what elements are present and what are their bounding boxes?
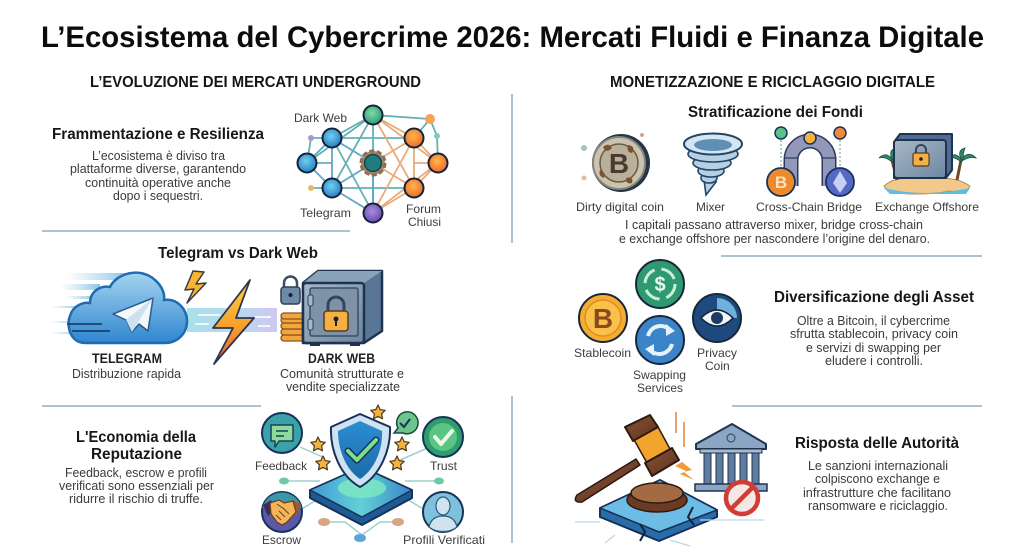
panel: telegram vs dark web <box>50 245 404 394</box>
icon: safe <box>303 271 382 346</box>
section heading: monetizzazione: MONETIZZAZIONE E RICICLAGGIO DIGITALE <box>610 74 935 91</box>
text block: risposta: ransomware e riciclaggio. <box>808 499 948 513</box>
text block: reputazione: verificati sono essenziali per <box>59 479 214 493</box>
label: forum chiusi: Chiusi <box>408 215 441 229</box>
icon: cracked block <box>575 480 764 546</box>
text block: risposta <box>803 459 951 513</box>
label: forum chiusi <box>406 202 441 229</box>
label: escrow: Escrow <box>262 533 301 547</box>
labels: assets: Privacy <box>697 346 737 360</box>
text block: reputazione <box>59 466 214 506</box>
icon: speed lines <box>50 273 126 334</box>
icon: dirty coin: B <box>609 148 629 179</box>
icon: coin stack <box>281 313 305 341</box>
labels: assets: Swapping <box>633 368 686 382</box>
icon: cross-chain bridge <box>767 127 854 196</box>
icon: chat check bubble <box>394 412 418 434</box>
icon: privacy eye <box>693 294 741 342</box>
text block: diversificazione: e servizi di swapping per <box>806 341 941 355</box>
labels: laundering steps: Dirty digital coin <box>576 200 664 214</box>
text block: frammentazione: L’ecosistema è diviso tra <box>92 149 225 163</box>
label: trust: Trust <box>430 459 458 473</box>
text block: reputazione: Feedback, escrow e profili <box>65 466 207 480</box>
panel: frammentazione e resilienza <box>52 106 448 229</box>
text block: frammentazione <box>70 149 246 203</box>
labels: laundering steps <box>576 200 979 214</box>
text block: frammentazione: continuità operative anche <box>85 176 231 190</box>
text block: diversificazione <box>790 314 958 368</box>
section heading: mercati underground: L’EVOLUZIONE DEI MERCATI UNDERGROUND <box>90 74 421 91</box>
text block: risposta: Le sanzioni internazionali <box>808 459 948 473</box>
icon: gavel <box>575 415 687 512</box>
icon: trust <box>423 417 463 473</box>
panel: economia della reputazione <box>59 405 485 547</box>
heading: economia della reputazione: Reputazione <box>91 446 182 463</box>
icon: cross-chain bridge: B <box>775 173 787 192</box>
label: dark web: Comunità strutturate e <box>280 367 404 381</box>
icon: mixer tornado <box>684 134 742 195</box>
text block: stratificazione: I capitali passano attraverso mixer, bridge cross-chain <box>625 218 923 232</box>
heading: risposta: Risposta delle Autorità <box>795 435 959 452</box>
text block: frammentazione: plattaforme diverse, garantendo <box>70 162 246 176</box>
icon: small lightning <box>185 271 206 303</box>
labels: assets: Coin <box>705 359 730 373</box>
icon: prohibition sign <box>726 482 758 514</box>
icon: profili verificati <box>403 492 485 547</box>
panel: diversificazione degli asset <box>574 260 975 395</box>
panel: risposta delle autorità <box>575 412 959 546</box>
label: forum chiusi: Forum <box>406 202 441 216</box>
label: profili verificati: Profili Verificati <box>403 533 485 547</box>
text block: risposta: colpiscono exchange e <box>815 472 940 486</box>
label: telegram <box>72 350 181 381</box>
icon: big lightning <box>213 280 254 364</box>
icon: offshore safe island <box>879 134 976 194</box>
labels: assets: Stablecoin <box>574 346 631 360</box>
icon: stablecoin dollar: $ <box>654 274 666 296</box>
icon: bitcoin <box>579 294 627 342</box>
icon: bank <box>695 424 767 491</box>
label: telegram: Distribuzione rapida <box>72 367 181 381</box>
text block: diversificazione: Oltre a Bitcoin, il cybercrime <box>797 314 950 328</box>
label: telegram: Telegram <box>300 206 351 220</box>
labels: assets <box>574 346 737 395</box>
title: L’Ecosistema del Cybercrime 2026: Mercati Fluidi e Finanza Digitale <box>41 21 984 54</box>
labels: laundering steps: Mixer <box>696 200 725 214</box>
panel: stratificazione dei fondi <box>576 104 979 246</box>
labels: laundering steps: Exchange Offshore <box>875 200 979 214</box>
label: dark web <box>280 350 404 394</box>
labels: laundering steps: Cross-Chain Bridge <box>756 200 862 214</box>
icon: bitcoin: B <box>593 303 613 334</box>
icon: feedback <box>255 413 308 473</box>
text block: diversificazione: eludere i controlli. <box>825 354 923 368</box>
icon: small padlock <box>281 276 300 304</box>
heading: telegram vs dark web: Telegram vs Dark Web <box>158 245 318 262</box>
icon: swapping <box>636 316 684 364</box>
chart: network diagram <box>294 106 448 229</box>
heading: economia della reputazione: L'Economia della <box>76 429 196 446</box>
text block: risposta: infrastrutture che facilitano <box>803 486 951 500</box>
heading: diversificazione: Diversificazione degli Asset <box>774 289 975 306</box>
icon: data flow band <box>187 308 277 332</box>
icon: escrow handshake <box>262 492 302 547</box>
text block: diversificazione: sfrutta stablecoin, privacy coin <box>790 327 958 341</box>
labels: assets: Services <box>637 381 683 395</box>
label: dark web: DARK WEB <box>308 350 375 366</box>
icon: shield platform <box>279 414 444 542</box>
icon: stablecoin dollar <box>636 260 684 308</box>
heading: economia della reputazione <box>76 429 196 463</box>
label: feedback: Feedback <box>255 459 308 473</box>
icon: impact sparks <box>675 412 694 480</box>
heading: stratificazione: Stratificazione dei Fondi <box>688 104 863 121</box>
text block: reputazione: ridurre il rischio di truffe. <box>69 492 203 506</box>
text block: stratificazione: e exchange offshore per nascondere l’origine del denaro. <box>619 232 930 246</box>
icon: stars <box>311 405 409 470</box>
label: dark web: vendite specializzate <box>286 380 400 394</box>
text block: frammentazione: dopo i sequestri. <box>113 189 203 203</box>
icon: cloud with paper plane <box>67 273 187 343</box>
label: dark web: Dark Web <box>294 111 347 125</box>
text block: stratificazione <box>619 218 930 246</box>
icon: dirty coin <box>581 133 650 192</box>
label: telegram: TELEGRAM <box>92 350 162 366</box>
heading: frammentazione: Frammentazione e Resilienza <box>52 126 264 143</box>
